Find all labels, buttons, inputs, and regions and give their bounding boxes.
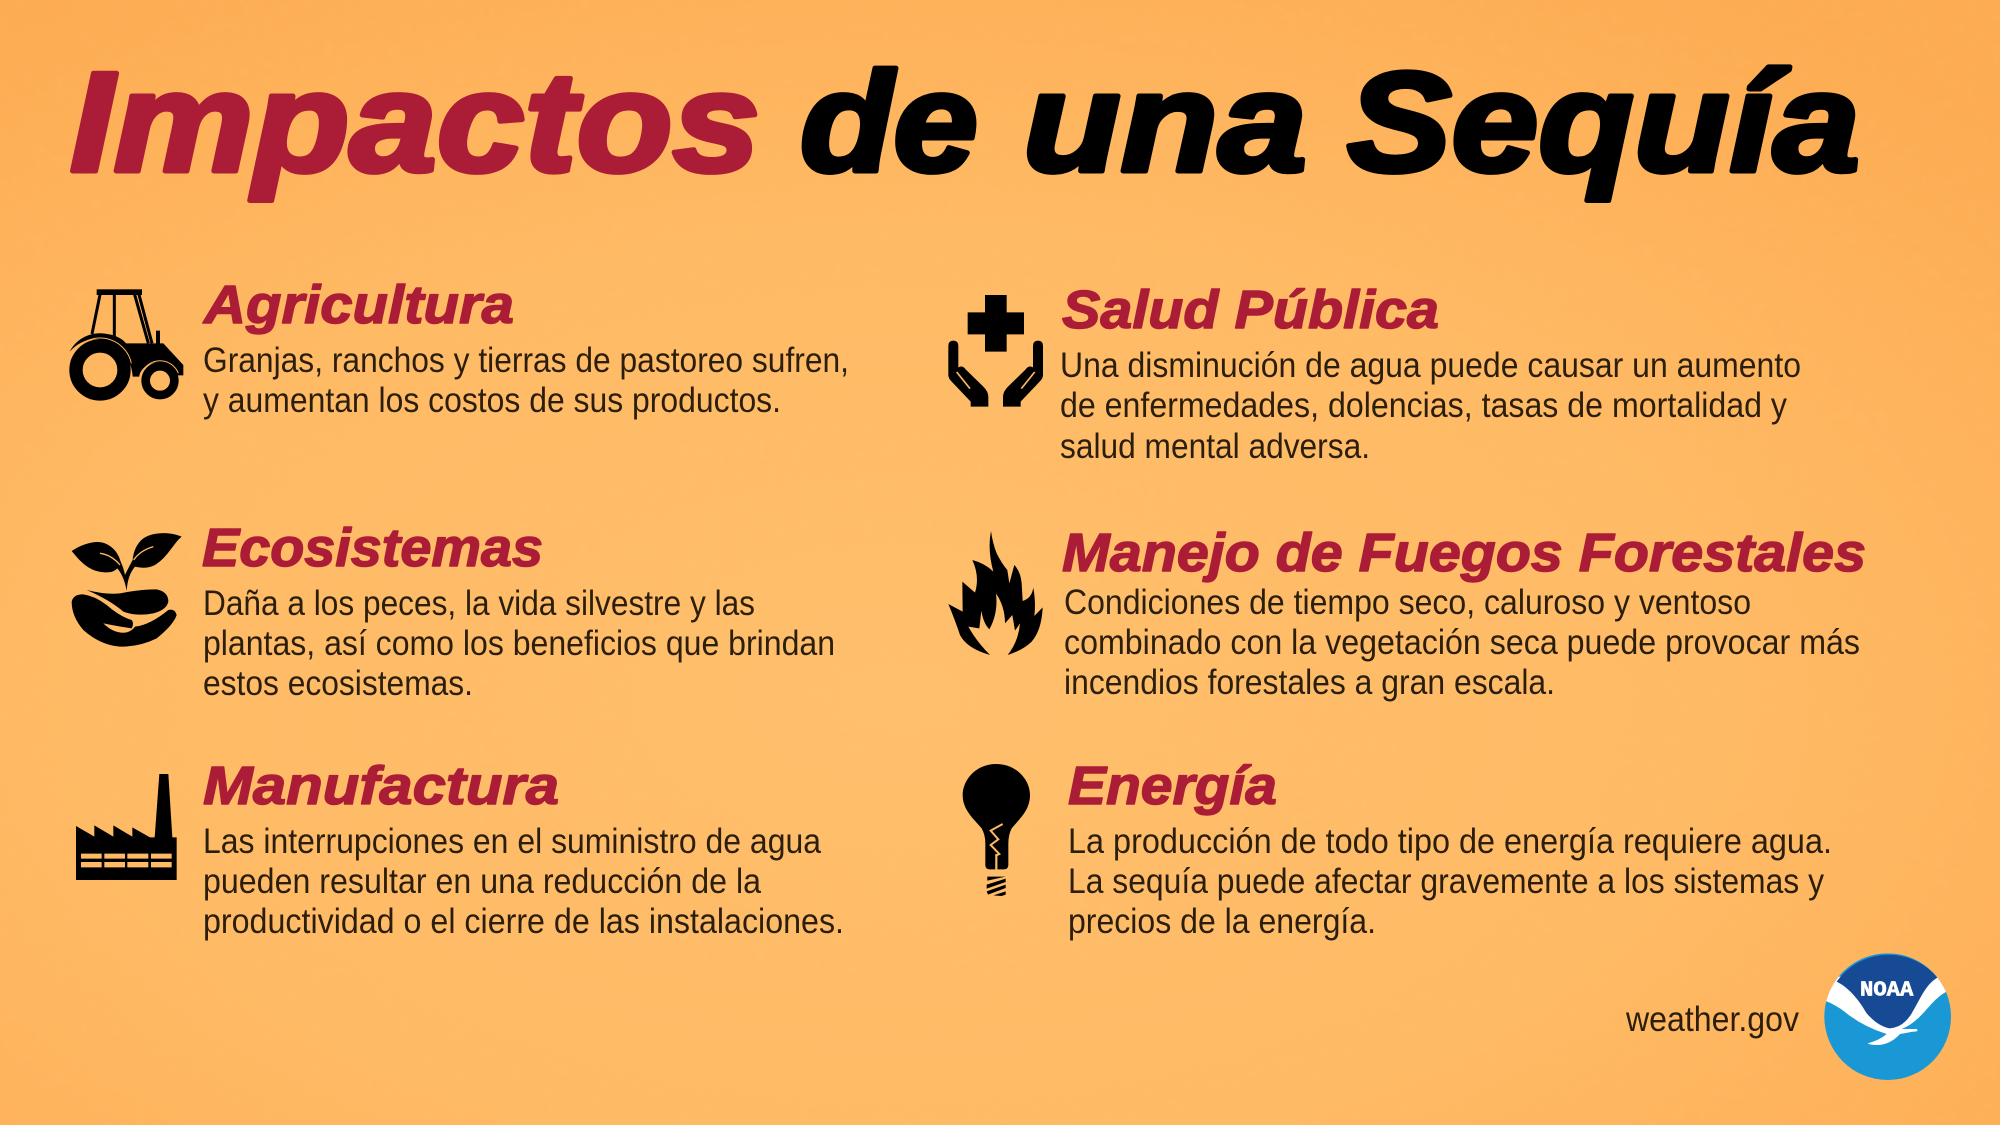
- icon: factory: [76, 774, 177, 880]
- text block: Las interrupciones en el suministro de agua: [203, 822, 821, 861]
- title: Sequía: [1347, 43, 1860, 202]
- icon: hands and cross: [948, 295, 1043, 407]
- panel: energia: [963, 756, 1832, 941]
- text block: [203, 822, 844, 941]
- text block: precios de la energía.: [1068, 902, 1376, 941]
- heading: Agricultura: [202, 275, 514, 335]
- website label: weather.gov: [1625, 1000, 1799, 1039]
- heading: Manejo de Fuegos Forestales: [1062, 523, 1866, 583]
- text block: plantas, así como los beneficios que brindan: [203, 624, 835, 663]
- text block: [1068, 822, 1832, 941]
- text block: [203, 341, 849, 420]
- icon: tractor: [70, 289, 183, 395]
- panel: agricultura: [70, 275, 849, 420]
- icon: light bulb: [963, 764, 1030, 896]
- panel: manejo de fuegos forestales: [948, 523, 1866, 702]
- panel: ecosistemas: [72, 518, 835, 703]
- text block: pueden resultar en una reducción de la: [203, 862, 761, 901]
- heading: Energía: [1068, 756, 1277, 816]
- text block: salud mental adversa.: [1060, 427, 1370, 466]
- text block: estos ecosistemas.: [203, 664, 473, 703]
- text block: combinado con la vegetación seca puede provocar más: [1064, 623, 1860, 662]
- icon: flame: [948, 531, 1043, 655]
- icon: NOAA logo: [1823, 953, 1951, 1080]
- text block: Condiciones de tiempo seco, caluroso y ventoso: [1064, 583, 1751, 622]
- text block: Una disminución de agua puede causar un aumento: [1060, 346, 1801, 385]
- icon: NOAA logo: NOAA: [1860, 979, 1914, 1003]
- heading: Ecosistemas: [202, 518, 543, 578]
- title: de: [800, 43, 978, 202]
- text block: Daña a los peces, la vida silvestre y las: [203, 584, 755, 623]
- text block: La producción de todo tipo de energía requiere agua.: [1068, 822, 1832, 861]
- heading: Salud Pública: [1062, 280, 1439, 340]
- text block: Granjas, ranchos y tierras de pastoreo sufren,: [203, 341, 849, 380]
- text block: La sequía puede afectar gravemente a los sistemas y: [1068, 862, 1824, 901]
- text block: [1060, 346, 1801, 466]
- text block: [1064, 583, 1860, 702]
- text block: [203, 584, 835, 703]
- panel: manufactura: [76, 756, 844, 941]
- panel: salud publica: [948, 280, 1801, 466]
- title: [70, 43, 1860, 202]
- title: una: [1023, 43, 1307, 202]
- text block: productividad o el cierre de las instalaciones.: [203, 902, 844, 941]
- title: Impactos: [70, 43, 760, 202]
- text block: y aumentan los costos de sus productos.: [203, 381, 781, 420]
- icon: seedling in hand: [72, 533, 182, 647]
- heading: Manufactura: [203, 756, 559, 816]
- text block: de enfermedades, dolencias, tasas de mortalidad y: [1060, 386, 1787, 425]
- text block: incendios forestales a gran escala.: [1064, 663, 1555, 702]
